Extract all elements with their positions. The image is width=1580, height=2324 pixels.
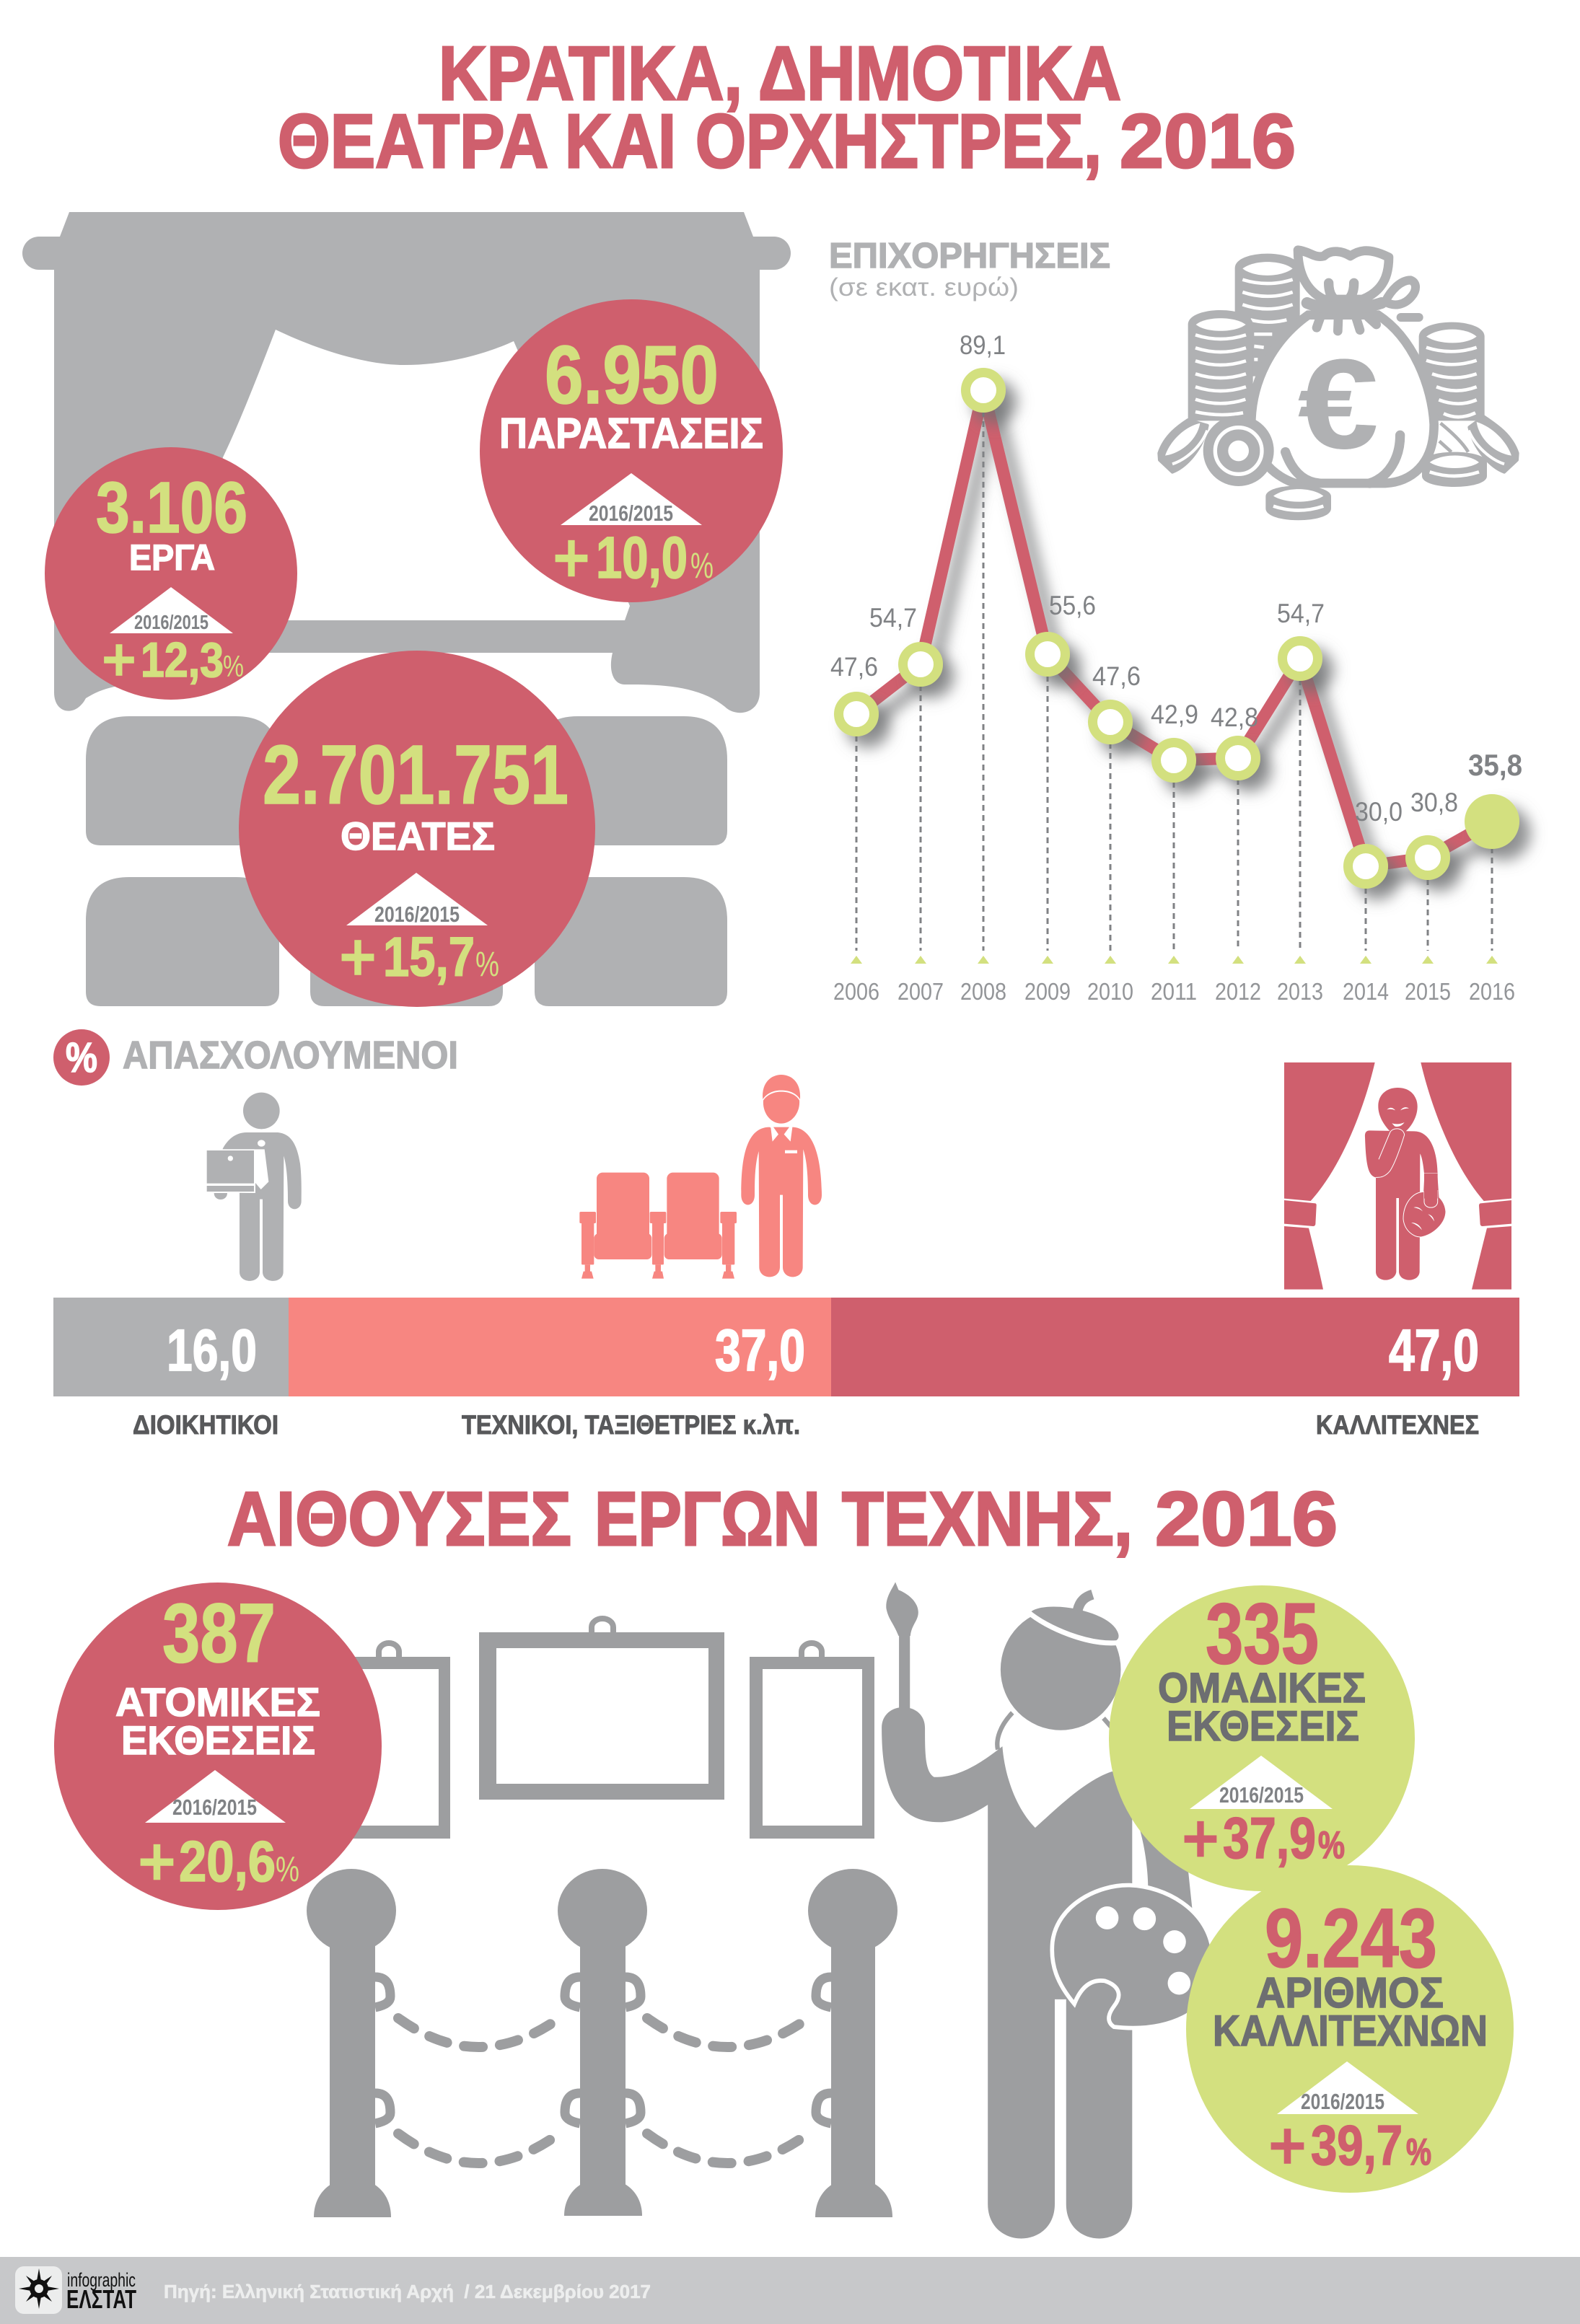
line chart: subsidies 2006-2016: 54,7 [869, 603, 917, 633]
panel: performances circle [480, 299, 783, 602]
panel: spectators circle: ΘΕΑΤΕΣ [341, 814, 495, 858]
panel: group exhibitions circle: 2016/2015 [1219, 1782, 1304, 1808]
panel: solo exhibitions circle: 20,6 [179, 1829, 276, 1893]
panel: spectators circle: 2.701.751 [263, 728, 569, 822]
icon: cinema seats [579, 1173, 737, 1279]
panel: group exhibitions circle: 335 [1206, 1585, 1319, 1682]
title: 2016 [1120, 99, 1296, 184]
panel: number of artists circle: + [1269, 2109, 1306, 2183]
line chart: subsidies 2006-2016: 42,9 [1151, 700, 1198, 729]
line chart: subsidies 2006-2016: 2014 [1343, 978, 1389, 1005]
line chart: subsidies 2006-2016: 89,1 [960, 330, 1006, 360]
panel: works circle [45, 447, 297, 700]
panel: number of artists circle: 2016/2015 [1301, 2089, 1384, 2114]
line chart: subsidies 2006-2016 [830, 330, 1522, 1005]
panel: performances circle: + [553, 519, 589, 597]
panel: solo exhibitions circle: 387 [162, 1586, 276, 1680]
panel: group exhibitions circle [1109, 1585, 1415, 1891]
second title: ΑΙΘΟΥΣΕΣ [227, 1476, 571, 1562]
line chart: subsidies 2006-2016: 2012 [1215, 978, 1261, 1005]
icon: actor on stage with curtains [1284, 1062, 1511, 1290]
panel: spectators circle: % [475, 946, 499, 984]
icon: picture frames [325, 1619, 874, 1839]
footer bar [0, 2257, 1580, 2324]
second title [227, 1476, 1338, 1562]
bar chart: employee shares: ΚΑΛΛΙΤΕΧΝΕΣ [1316, 1410, 1479, 1440]
line chart: subsidies 2006-2016: 2010 [1087, 978, 1133, 1005]
line chart: subsidies 2006-2016: 2013 [1277, 978, 1323, 1005]
panel: group exhibitions circle: 37,9 [1223, 1806, 1316, 1871]
panel: group exhibitions circle: ΕΚΘΕΣΕΙΣ [1167, 1703, 1359, 1750]
heading: employees [53, 1029, 458, 1086]
logo: ELSTAT infographic [15, 2266, 136, 2314]
line chart: subsidies 2006-2016: 35,8 [1468, 748, 1522, 782]
panel: works circle: 12,3 [141, 633, 224, 687]
panel: number of artists circle: % [1406, 2131, 1431, 2173]
title: ΟΡΧΗΣΤΡΕΣ, [695, 99, 1102, 184]
panel: works circle: 2016/2015 [134, 611, 209, 633]
icon: money bag with coins: € [1298, 333, 1379, 475]
panel: solo exhibitions circle: ΑΤΟΜΙΚΕΣ [115, 1679, 320, 1725]
panel: spectators circle: + [340, 920, 376, 994]
panel: solo exhibitions circle: + [139, 1823, 175, 1899]
title: ΔΗΜΟΤΙΚΑ [758, 31, 1121, 116]
panel: solo exhibitions circle: 2016/2015 [172, 1795, 257, 1820]
panel: works circle: ΕΡΓΑ [129, 537, 215, 578]
icon: office worker with laptop [207, 1093, 302, 1281]
source line: Πηγή: Ελληνική Στατιστική Αρχή / 21 Δεκεμβρίου 2017 [164, 2281, 651, 2302]
heading: subsidies: (σε εκατ. ευρώ) [829, 273, 1019, 301]
line chart: subsidies 2006-2016: 55,6 [1049, 591, 1096, 620]
icon: audience seats [86, 716, 727, 1006]
heading: employees: ΑΠΑΣΧΟΛΟΥΜΕΝΟΙ [123, 1034, 458, 1077]
panel: group exhibitions circle: % [1318, 1824, 1345, 1867]
panel: solo exhibitions circle: ΕΚΘΕΣΕΙΣ [121, 1717, 315, 1763]
panel: number of artists circle: ΑΡΙΘΜΟΣ [1256, 1969, 1444, 2017]
line chart: subsidies 2006-2016: 2007 [897, 978, 944, 1005]
logo: ELSTAT infographic: ΕΛΣΤΑΤ [66, 2284, 136, 2314]
second title: 2016 [1155, 1476, 1338, 1562]
line chart: subsidies 2006-2016: 54,7 [1277, 599, 1325, 628]
panel: works circle: % [223, 649, 244, 683]
panel: number of artists circle [1186, 1865, 1514, 2193]
line chart: subsidies 2006-2016: 30,0 [1355, 797, 1403, 827]
line chart: subsidies 2006-2016: 2011 [1151, 978, 1197, 1005]
panel: group exhibitions circle: + [1182, 1800, 1219, 1876]
panel: performances circle: % [690, 545, 714, 586]
panel: spectators circle: 15,7 [383, 926, 475, 988]
line chart: subsidies 2006-2016: 2016 [1469, 978, 1515, 1005]
line chart: subsidies 2006-2016: 2015 [1405, 978, 1451, 1005]
panel: performances circle: ΠΑΡΑΣΤΑΣΕΙΣ [499, 410, 763, 457]
panel: spectators circle [239, 651, 595, 1007]
line chart: subsidies 2006-2016: 2008 [960, 978, 1006, 1005]
line chart: subsidies 2006-2016: 42,8 [1211, 703, 1258, 732]
panel: works circle: + [102, 627, 136, 692]
panel: group exhibitions circle: ΟΜΑΔΙΚΕΣ [1158, 1665, 1366, 1712]
line chart: subsidies 2006-2016: 30,8 [1410, 788, 1458, 817]
icon: money bag with coins [1159, 250, 1517, 520]
title: ΘΕΑΤΡΑ [278, 99, 548, 184]
second title: ΤΕΧΝΗΣ, [842, 1476, 1133, 1562]
bar chart: employee shares: ΔΙΟΙΚΗΤΙΚΟΙ [133, 1410, 278, 1440]
line chart: subsidies 2006-2016: 2006 [833, 978, 879, 1005]
title: ΚΡΑΤΙΚΑ, [439, 31, 742, 116]
panel: number of artists circle: ΚΑΛΛΙΤΕΧΝΩΝ [1213, 2007, 1488, 2055]
heading: subsidies: ΕΠΙΧΟΡΗΓΗΣΕΙΣ [829, 237, 1110, 276]
line chart: subsidies 2006-2016: 47,6 [1092, 661, 1141, 691]
icon: usher [741, 1075, 822, 1277]
icon: painter with brush and palette [882, 1582, 1216, 2239]
panel: solo exhibitions circle: % [276, 1850, 299, 1889]
panel: performances circle: 2016/2015 [589, 501, 673, 526]
panel: solo exhibitions circle [54, 1583, 382, 1910]
panel: number of artists circle: 39,7 [1311, 2113, 1403, 2177]
line chart: subsidies 2006-2016: 2009 [1024, 978, 1071, 1005]
heading: employees: % [66, 1034, 97, 1081]
panel: number of artists circle: 9.243 [1265, 1891, 1437, 1985]
second title: ΕΡΓΩΝ [594, 1476, 820, 1562]
panel: performances circle: 6.950 [545, 330, 719, 421]
bar chart: employee shares [53, 1298, 1519, 1440]
bar chart: employee shares: 37,0 [715, 1318, 805, 1383]
bar chart: employee shares: ΤΕΧΝΙΚΟΙ, ΤΑΞΙΘΕΤΡΙΕΣ κ.λπ. [462, 1410, 800, 1440]
icon: rope barrier posts [307, 1869, 897, 2217]
title [278, 31, 1296, 184]
panel: performances circle: 10,0 [596, 525, 688, 591]
bar chart: employee shares: 47,0 [1389, 1318, 1479, 1383]
bar chart: employee shares: 16,0 [167, 1318, 257, 1383]
line chart: subsidies 2006-2016: 47,6 [830, 652, 878, 682]
panel: spectators circle: 2016/2015 [374, 902, 460, 927]
panel: works circle: 3.106 [96, 467, 247, 548]
heading: subsidies [829, 237, 1110, 301]
logo: ELSTAT infographic: infographic [67, 2269, 136, 2291]
title: ΚΑΙ [565, 99, 676, 184]
icon: theatre stage with curtains [22, 212, 791, 723]
